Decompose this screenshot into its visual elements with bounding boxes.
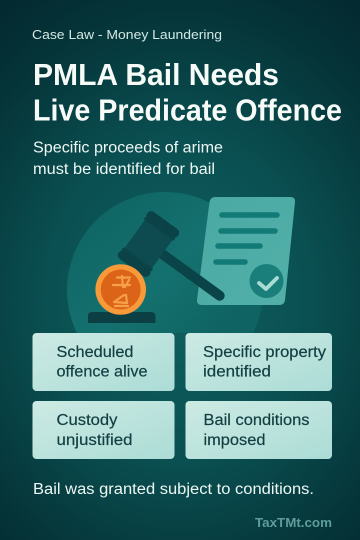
background disc	[67, 192, 262, 333]
title: Live Predicate Offence	[33, 94, 342, 128]
conclusion text: Bail was granted subject to conditions.	[33, 481, 314, 498]
title	[33, 58, 342, 128]
card: specific property identified: identified	[203, 364, 271, 380]
subtitle: Specific proceeds of arime	[33, 140, 223, 156]
icon: document	[197, 197, 295, 305]
card: scheduled offence alive	[32, 333, 174, 391]
brand: TaxTMt.com: TaxTMt.com	[255, 515, 332, 530]
card: specific property identified: Specific property	[203, 344, 326, 361]
card: bail conditions imposed: imposed	[204, 432, 266, 449]
subtitle	[33, 140, 223, 178]
card: bail conditions imposed: Bail conditions	[204, 412, 310, 429]
card: scheduled offence alive: Scheduled	[56, 344, 134, 361]
document text lines	[216, 215, 277, 262]
icon: gavel	[116, 209, 241, 322]
card: specific property identified	[186, 333, 332, 391]
card: custody unjustified	[32, 401, 174, 459]
eyebrow: case law category: Case Law - Money Laundering	[32, 27, 222, 42]
icon: check badge	[250, 264, 284, 298]
gavel base block	[88, 312, 156, 323]
card: custody unjustified: unjustified	[56, 432, 132, 449]
card: bail conditions imposed	[186, 401, 332, 459]
card: scheduled offence alive: offence alive	[56, 364, 148, 380]
illustration: gavel, coin and document	[67, 192, 295, 333]
title: PMLA Bail Needs	[33, 58, 279, 92]
icon: orange coin	[95, 264, 146, 315]
subtitle: must be identified for bail	[33, 161, 215, 178]
card: custody unjustified: Custody	[56, 412, 118, 429]
